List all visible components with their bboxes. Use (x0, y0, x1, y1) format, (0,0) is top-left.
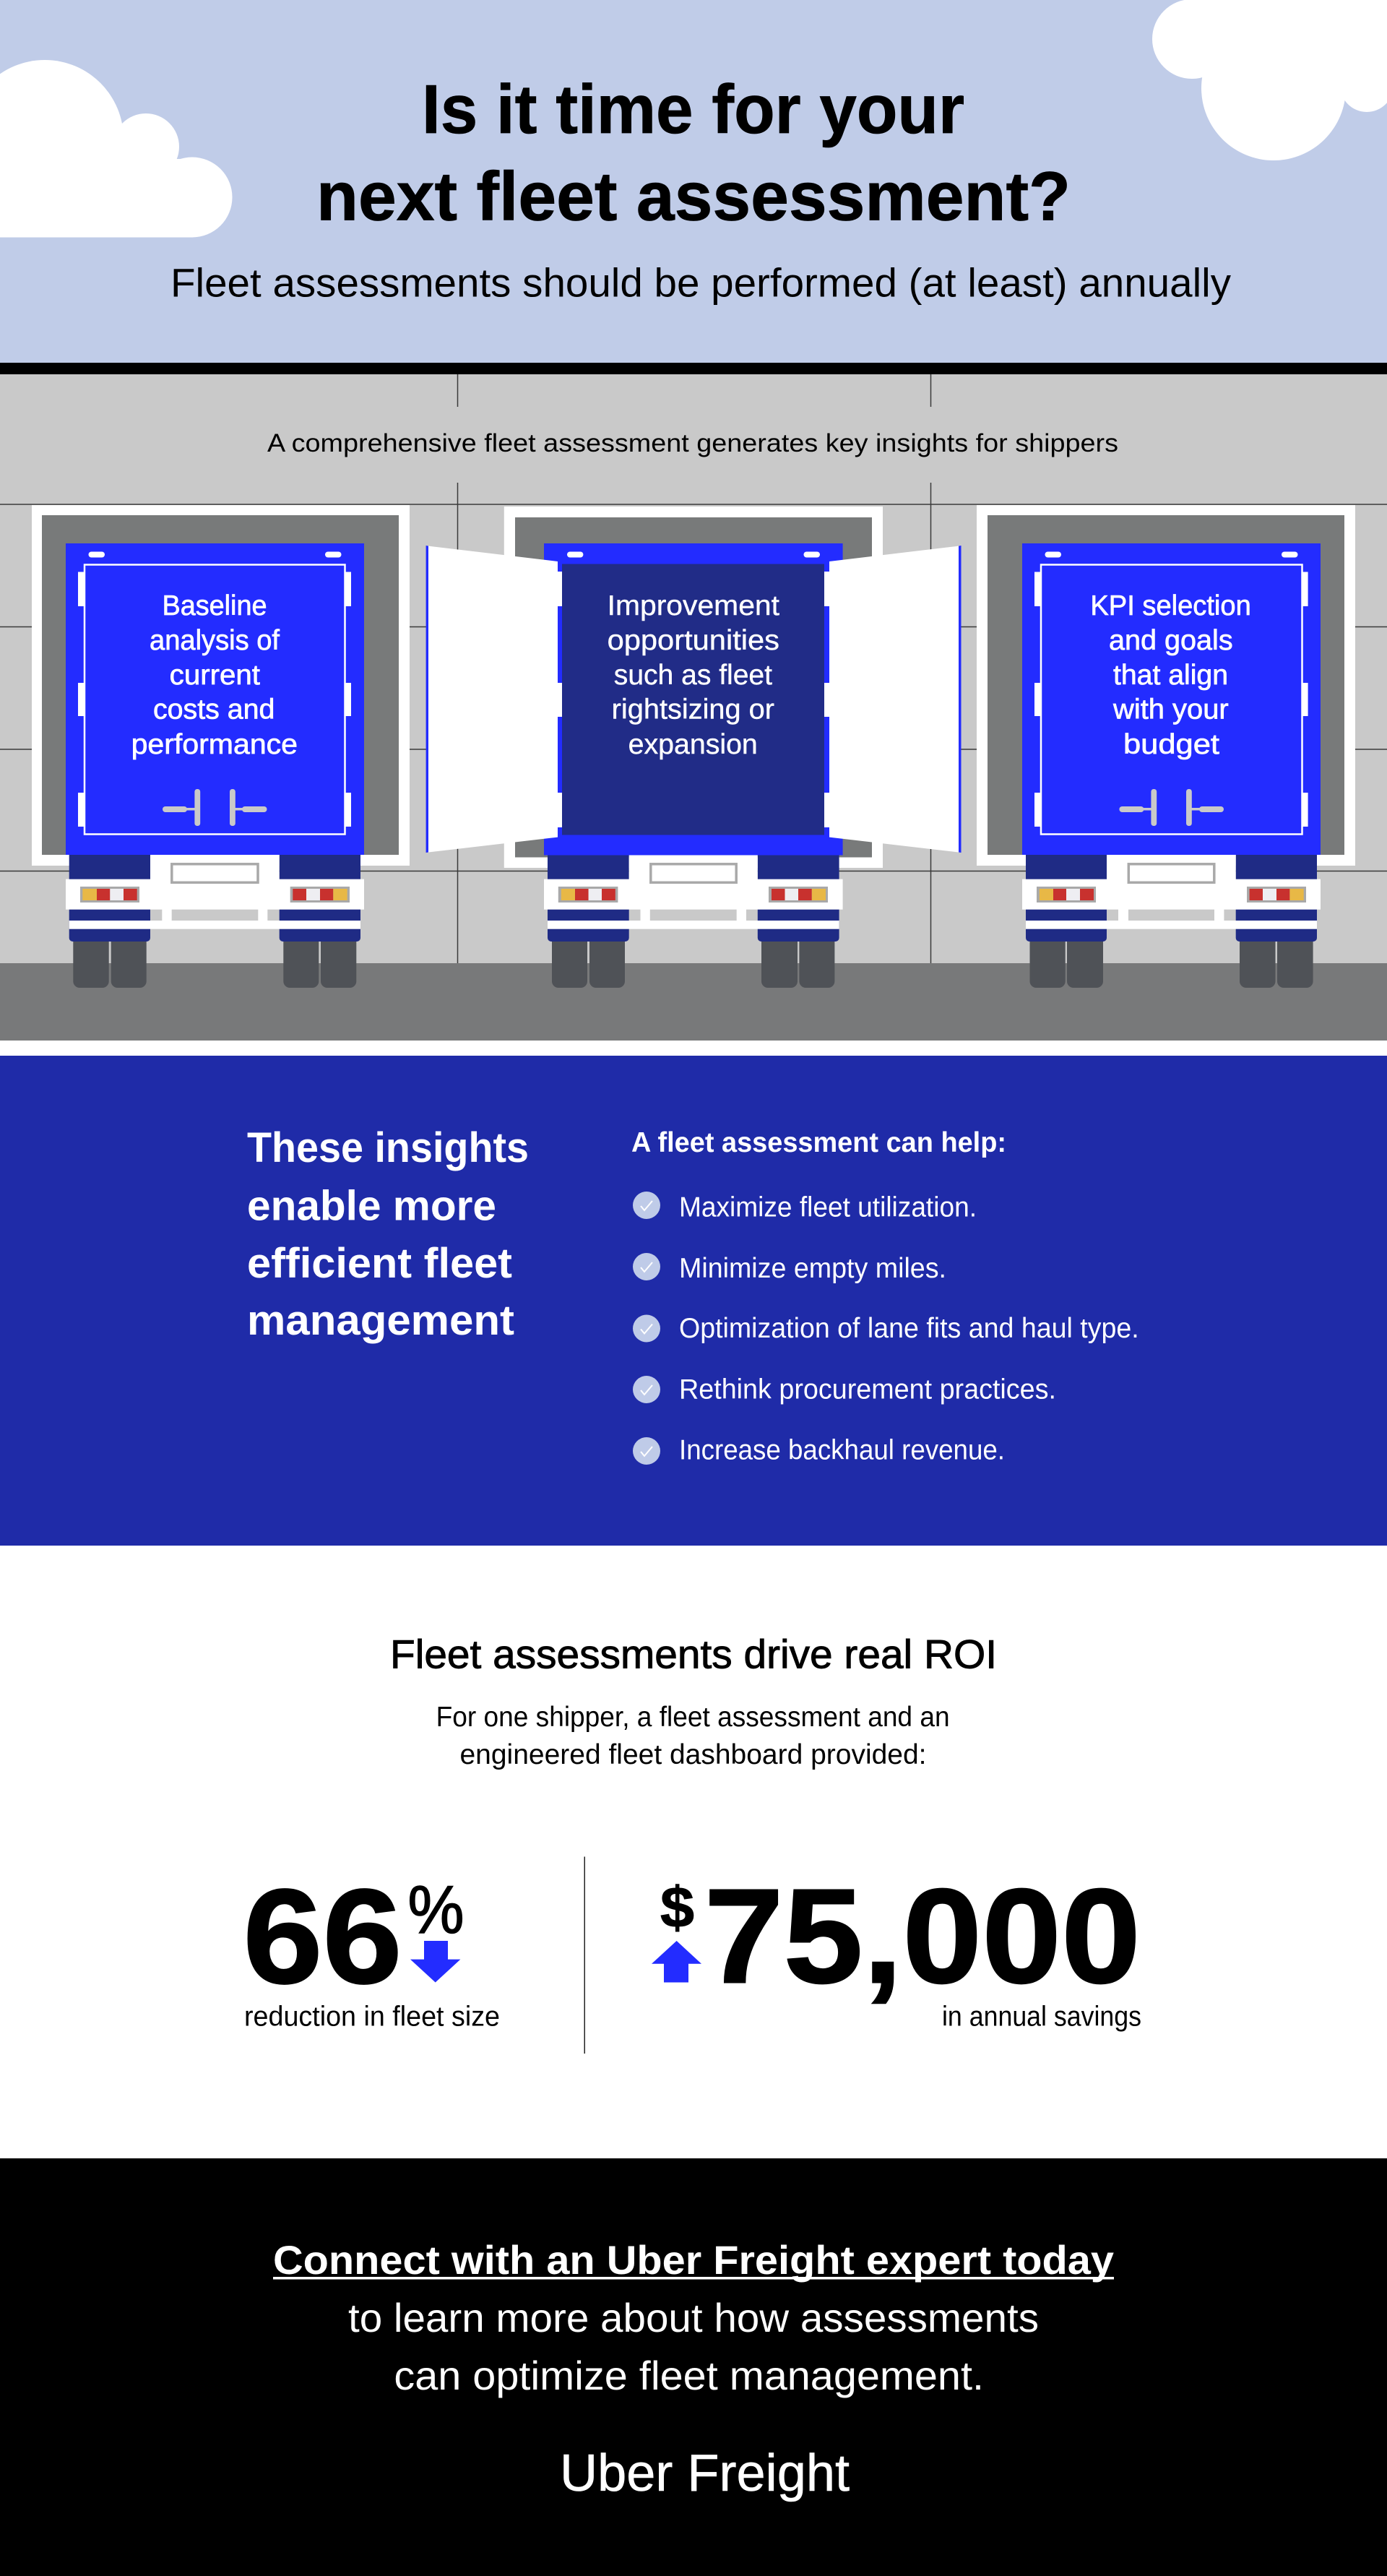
checklist item 1: Maximize fleet utilization. (679, 1192, 977, 1223)
truck 1 rear door (66, 543, 364, 855)
subtitle: Fleet assessments should be performed (at least) annually (170, 260, 1231, 305)
heading: insights: management (247, 1297, 514, 1344)
text: CTA body (348, 2295, 1039, 2398)
divider (584, 1857, 585, 2054)
panel: sky header (0, 0, 1387, 363)
panel: ROI results (0, 1546, 1387, 2158)
text: truck 2 label: rightsizing or (612, 694, 774, 725)
stat: 66% reduction: reduction in fleet size (244, 2002, 500, 2032)
text: list heading: A fleet assessment can help: (631, 1127, 1006, 1158)
text: truck 3 label: budget (1123, 729, 1219, 760)
text: CTA body: can optimize fleet management. (394, 2353, 984, 2398)
heading: ROI: Fleet assessments drive real ROI (390, 1632, 997, 1676)
text: truck 2 label: opportunities (608, 625, 779, 656)
panel: loading dock scene (0, 374, 1387, 1041)
text: ROI intro: engineered fleet dashboard provided: (459, 1739, 926, 1770)
text: truck 3 label: that align (1113, 660, 1228, 691)
panel: call to action (0, 2158, 1387, 2576)
checklist item 4: Rethink procurement practices. (679, 1374, 1056, 1405)
text: truck 1 label: costs and (153, 694, 275, 725)
checklist item 5: Increase backhaul revenue. (679, 1435, 1005, 1465)
stat: $75,000 savings: $ (660, 1875, 694, 1939)
text: truck 1 label: performance (131, 729, 298, 760)
text: truck 2 label: such as fleet (614, 660, 772, 691)
icon: up arrow (652, 1941, 701, 1983)
checklist item 2: Minimize empty miles. (679, 1253, 946, 1284)
right open door (824, 546, 961, 853)
truck 1: baseline analysis (32, 505, 410, 988)
stat: 66% reduction (243, 1862, 500, 2032)
text: truck 3 label: KPI selection (1090, 590, 1251, 621)
icon: right cloud (1152, 0, 1387, 160)
text: truck 2 label: expansion (628, 729, 758, 760)
truck 2: improvement opportunities, doors open (426, 507, 961, 988)
heading: insights: efficient fleet (247, 1240, 512, 1287)
left open door (426, 546, 562, 853)
heading: insights: enable more (247, 1182, 496, 1230)
stat: $75,000 savings: 75,000 (704, 1861, 1141, 2012)
text: CTA body: to learn more about how assessments (348, 2295, 1039, 2340)
text: truck 3 label: with your (1112, 694, 1229, 725)
text: truck 1 label: current (170, 660, 260, 691)
title: next fleet assessment? (316, 158, 1071, 236)
link: connect with expert: Connect with an Uber Freight expert today (273, 2237, 1114, 2283)
text: truck 3 label: and goals (1109, 625, 1233, 656)
text: truck 3 label (1090, 590, 1251, 760)
logo: Uber Freight: Uber Freight (560, 2444, 850, 2502)
text: truck 1 label: analysis of (150, 625, 280, 656)
heading: insights (247, 1124, 529, 1344)
stat: $75,000 savings: in annual savings (942, 2002, 1141, 2032)
checklist item 3: Optimization of lane fits and haul type. (679, 1313, 1139, 1344)
text: ROI intro: For one shipper, a fleet assessment and an (436, 1702, 950, 1733)
icon: down arrow (410, 1941, 460, 1983)
title (316, 71, 1071, 236)
truck 3 rear door (1022, 543, 1321, 855)
stat: 66% reduction: % (407, 1871, 464, 1947)
title: Is it time for your (422, 71, 964, 148)
icon: left cloud (0, 60, 233, 237)
panel: insights (0, 1056, 1387, 1546)
heading: insights: These insights (247, 1124, 529, 1171)
text: ROI intro (436, 1702, 950, 1770)
truck 3: KPI selection (977, 505, 1355, 988)
text: truck 2 label (608, 590, 779, 760)
panel: black divider bar (0, 363, 1387, 374)
text: truck 1 label: Baseline (162, 590, 267, 621)
truck 2 cargo opening (544, 543, 843, 856)
stat: 66% reduction: 66 (243, 1862, 402, 2012)
text: truck 1 label (131, 590, 298, 760)
text: scene caption: A comprehensive fleet assessment generates key insights for shippers (267, 429, 1118, 457)
text: truck 2 label: Improvement (608, 590, 779, 621)
